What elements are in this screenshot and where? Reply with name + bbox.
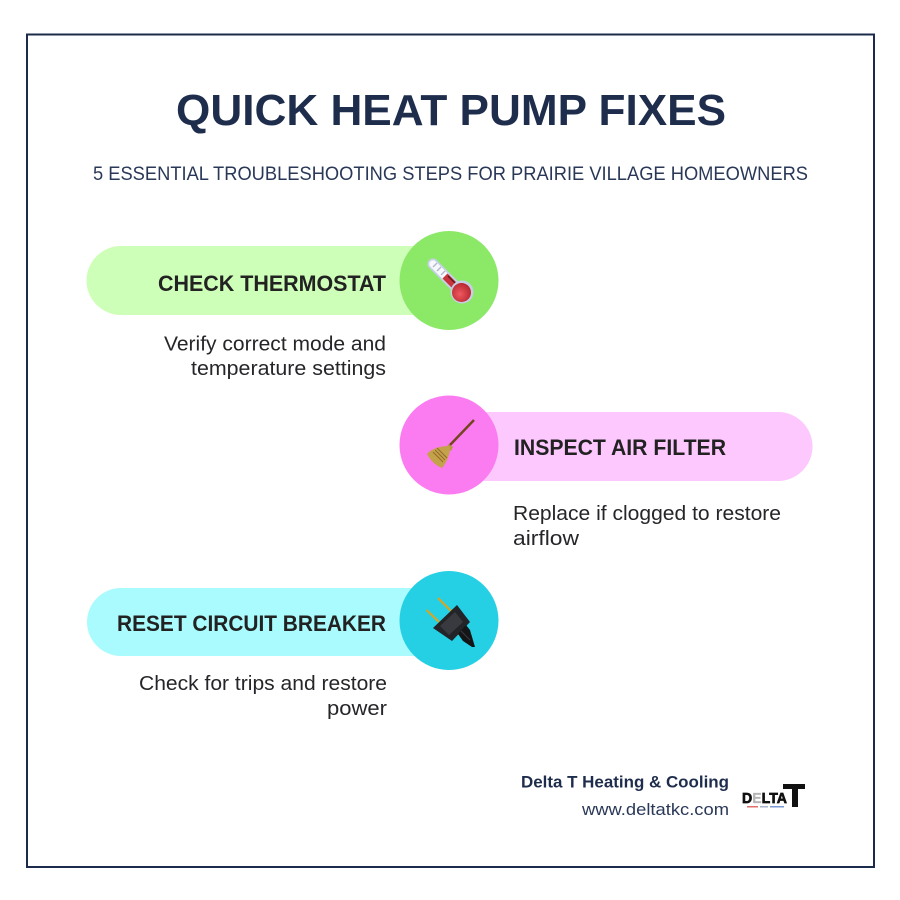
step 2 pill [460, 412, 813, 481]
title: QUICK HEAT PUMP FIXES [176, 86, 726, 135]
logo: Delta T [742, 784, 805, 808]
step 3: reset circuit breaker [87, 571, 498, 720]
icon: plug [426, 598, 475, 647]
step 2 heading: INSPECT AIR FILTER [514, 435, 726, 460]
step 3 description: power [327, 698, 387, 720]
company name: Delta T Heating & Cooling [521, 774, 729, 792]
step 3 heading: RESET CIRCUIT BREAKER [117, 611, 386, 636]
step 1 heading: CHECK THERMOSTAT [158, 271, 387, 296]
step 1 circle [400, 231, 498, 330]
step 3 description: Check for trips and restore [139, 673, 387, 695]
step 2 description: airflow [513, 528, 580, 550]
step 1 description [164, 334, 386, 380]
step 2: inspect air filter [400, 396, 813, 550]
icon: broom [427, 420, 474, 468]
website: www.deltatkc.com [581, 801, 729, 819]
step 1 pill [87, 246, 440, 315]
icon: thermometer [433, 263, 474, 304]
step 3 pill [87, 588, 440, 656]
subtitle: 5 ESSENTIAL TROUBLESHOOTING STEPS FOR PRAIRIE VILLAGE HOMEOWNERS [93, 163, 808, 185]
step 2 circle [400, 396, 498, 494]
step 2 description [513, 503, 781, 550]
step 1 description: temperature settings [191, 358, 386, 380]
step 3 description [139, 673, 387, 720]
step 2 description: Replace if clogged to restore [513, 503, 781, 525]
logo: Delta T: DELTA [742, 790, 787, 807]
step 1 description: Verify correct mode and [164, 334, 386, 356]
step 3 circle [400, 571, 498, 670]
step 1: check thermostat [87, 231, 499, 380]
